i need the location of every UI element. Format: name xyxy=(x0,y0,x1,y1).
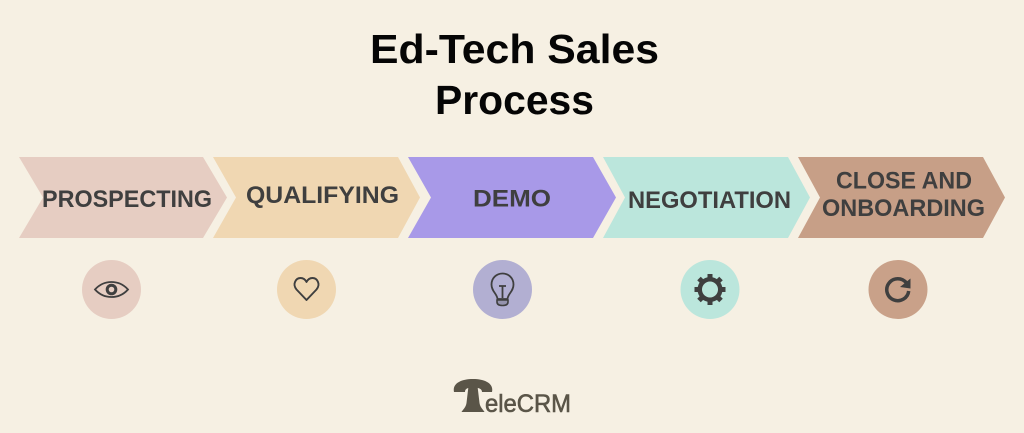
icon: refresh xyxy=(868,260,928,319)
step: negotiation xyxy=(603,157,810,238)
icon: light bulb xyxy=(473,260,532,319)
title: Process xyxy=(435,77,594,123)
step: qualifying xyxy=(213,157,420,238)
title xyxy=(370,26,659,123)
step: negotiation: NEGOTIATION xyxy=(628,187,791,214)
step: close and onboarding xyxy=(798,157,1005,238)
step: prospecting xyxy=(19,157,227,238)
title: Ed-Tech Sales xyxy=(370,26,659,72)
step: demo xyxy=(408,157,616,238)
icon: gear xyxy=(680,260,740,319)
logo: TeleCRM xyxy=(454,379,571,418)
icon: eye xyxy=(82,260,141,319)
step: close and onboarding: CLOSE AND xyxy=(836,168,972,194)
icon: heart xyxy=(277,260,336,319)
step: close and onboarding: ONBOARDING xyxy=(822,195,985,222)
step: demo: DEMO xyxy=(473,186,551,212)
step: qualifying: QUALIFYING xyxy=(246,182,399,209)
step: prospecting: PROSPECTING xyxy=(42,186,212,213)
logo: TeleCRM: eleCRM xyxy=(485,390,571,418)
